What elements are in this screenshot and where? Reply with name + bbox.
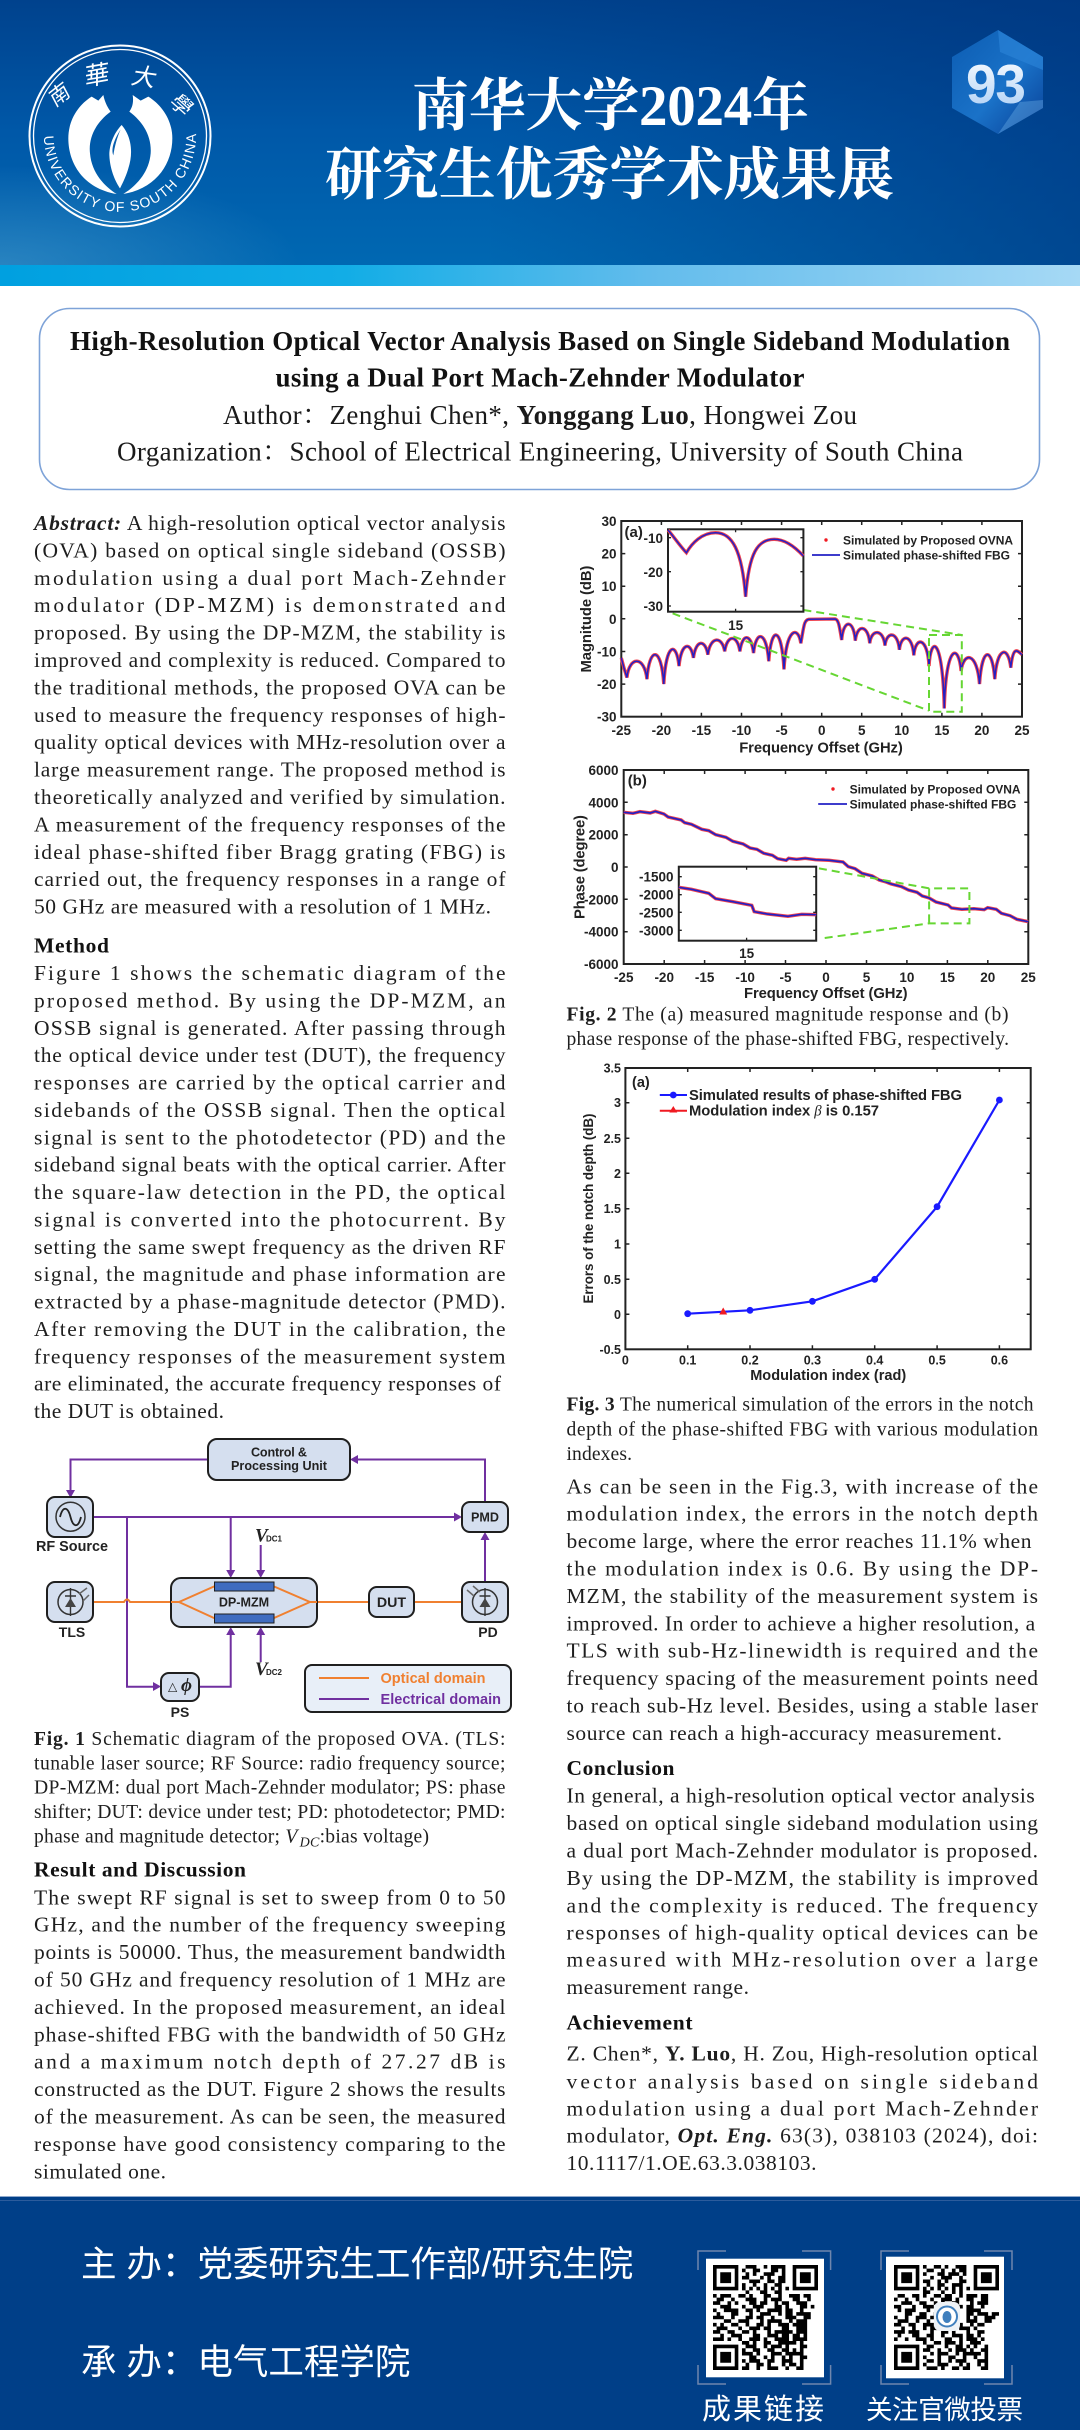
abstract text: improved and complexity is reduced. Compared to [34, 648, 506, 672]
DUT [369, 1587, 414, 1617]
method section: signal, the magnitude and phase information are [34, 1262, 505, 1286]
discussion continued: As can be seen in the Fig.3, with increase of the [566, 1474, 1038, 1498]
PD [462, 1582, 508, 1640]
PD: PD [478, 1624, 498, 1640]
result and discussion section: Result and Discussion [34, 1858, 246, 1882]
achievement section: modulator, Opt. Eng. 63(3), 038103 (2024), doi: [566, 2124, 1038, 2148]
conclusion section: Conclusion [566, 1756, 675, 1780]
RF source [36, 1497, 108, 1555]
PS phase shifter: PS [171, 1704, 189, 1720]
axis labels: 1.5 [604, 1202, 621, 1216]
abstract text: quality optical devices with MHz-resolution over a [34, 730, 506, 754]
PMD: PMD [471, 1510, 499, 1524]
chart: figure 3 notch depth errors: (a) [632, 1075, 650, 1091]
axis labels: 5 [863, 970, 871, 985]
legend [818, 782, 1021, 812]
discussion continued: improved. In order to achieve a higher resolution, a [566, 1611, 1036, 1635]
figure 1 caption [34, 1729, 506, 1851]
university logo: 南 [43, 73, 75, 114]
axis labels: 10 [899, 970, 914, 985]
result and discussion section: and a maximum notch depth of 27.27 dB is [34, 2050, 506, 2074]
curve [624, 811, 1028, 938]
inset: -20 [643, 565, 663, 580]
method section: are eliminated, the accurate frequency responses of [34, 1372, 502, 1396]
inset [643, 529, 803, 633]
abstract text: carried out, the frequency responses in a range of [34, 867, 506, 891]
abstract text: proposed. By using the DP-MZM, the stability is [34, 621, 506, 645]
discussion continued: frequency spacing of the measurement points need [566, 1666, 1038, 1690]
method section: Figure 1 shows the schematic diagram of the [34, 961, 506, 985]
result and discussion section: achieved. In the proposed measurement, an ideal [34, 1995, 506, 2019]
axis labels: 0.4 [866, 1354, 883, 1368]
inset: 15 [728, 618, 744, 633]
organizers text: 主 办：党委研究生工作部/研究生院 [81, 2244, 633, 2284]
axis labels: -0.5 [599, 1343, 621, 1357]
figure 2 caption: Fig. 2 The (a) measured magnitude response and (b) [566, 1005, 1008, 1026]
inset: -10 [643, 531, 663, 546]
chart: figure 2a magnitude response: (a) [624, 524, 643, 541]
figure 1 caption: shifter; DUT: device under test; PD: photodetector; PMD: [34, 1802, 506, 1823]
header banner [0, 0, 1080, 286]
axis labels: 0.5 [604, 1273, 621, 1287]
organizers text: 承 办：电气工程学院 [81, 2342, 410, 2382]
figure 1 caption: Fig. 1 Schematic diagram of the proposed OVA. (TLS: [34, 1729, 506, 1750]
conclusion section: By using the DP-MZM, the stability is improved [566, 1866, 1038, 1890]
VDC2 label [255, 1659, 283, 1680]
achievement section: modulation using a dual port Mach-Zehnder [566, 2097, 1038, 2121]
PS phase shifter [161, 1673, 199, 1720]
DP-MZM modulator: DP-MZM [219, 1596, 269, 1610]
chart: figure 2b phase response [572, 763, 1036, 1002]
axis labels: -25 [614, 970, 634, 985]
figure 3 caption: depth of the phase-shifted FBG with various modulation [566, 1420, 1038, 1441]
method section: sidebands of the OSSB signal. Then the optical [34, 1098, 506, 1122]
axis labels: 0.6 [991, 1354, 1008, 1368]
method section: signal is sent to the photodetector (PD) and the [34, 1125, 506, 1149]
axis labels [581, 1062, 1008, 1384]
university logo: 學 [163, 88, 201, 122]
discussion continued [566, 1474, 1038, 1745]
discussion continued: become large, where the error reaches 11.1% when [566, 1529, 1032, 1553]
figure 1 caption: DC [299, 1836, 320, 1851]
axis labels: 0.3 [804, 1354, 821, 1368]
axis labels: 15 [940, 970, 955, 985]
figure 1 caption: tunable laser source; RF Source: radio frequency source; [34, 1753, 506, 1774]
result and discussion section: response have good consistency comparing to the [34, 2132, 506, 2156]
legend: Simulated by Proposed OVNA [850, 782, 1021, 796]
TLS [47, 1582, 93, 1640]
abstract text: modulation using a dual port Mach-Zehnder [34, 566, 506, 590]
result and discussion section: of the measurement. As can be seen, the measured [34, 2104, 506, 2128]
method section: sideband signal beats with the optical carrier. After [34, 1153, 506, 1177]
result and discussion section: The swept RF signal is set to sweep from 0 to 50 [34, 1885, 506, 1909]
figure 3 caption: Fig. 3 The numerical simulation of the errors in the notch [566, 1395, 1034, 1416]
DP-MZM modulator [171, 1578, 317, 1627]
abstract text: ideal phase-shifted fiber Bragg grating (FBG) is [34, 840, 505, 864]
inset: -3000 [639, 923, 674, 938]
method section: setting the same swept frequency as the driven RF [34, 1235, 506, 1259]
conclusion section: and the complexity is reduced. The frequency [566, 1893, 1038, 1917]
axis labels: -6000 [584, 957, 618, 972]
method section: proposed method. By using the DP-MZM, an [34, 988, 506, 1012]
method section: frequency responses of the measurement system [34, 1344, 506, 1368]
method section: Method [34, 934, 109, 958]
abstract text [32, 511, 506, 919]
axis labels: -4000 [584, 925, 618, 940]
method section: the square-law detection in the PD, the optical [34, 1180, 506, 1204]
method section: responses are carried by the optical carrier and [34, 1070, 506, 1094]
axis labels: 0 [609, 612, 616, 627]
axis labels: 2.5 [604, 1132, 621, 1146]
RF source: RF Source [36, 1539, 108, 1555]
axis labels: -2000 [584, 892, 618, 907]
method section: signal is converted into the photocurrent. By [34, 1207, 506, 1231]
axis labels: 3.5 [604, 1062, 621, 1076]
axis labels: 0.5 [928, 1354, 946, 1368]
axis labels: 20 [980, 970, 995, 985]
axis labels: -30 [597, 710, 616, 725]
figure 3 caption: indexes. [566, 1444, 632, 1465]
method section: After removing the DUT in the calibration, the [34, 1317, 506, 1341]
axis labels: 0 [611, 860, 618, 875]
axis labels: 25 [1014, 723, 1030, 738]
VDC1 label: V [255, 1526, 269, 1547]
conclusion section: based on optical single sideband modulation using [566, 1811, 1038, 1835]
abstract text: 50 GHz are measured with a resolution of 1 MHz. [34, 895, 491, 919]
method section: the DUT is obtained. [34, 1399, 224, 1423]
DUT: DUT [377, 1595, 406, 1611]
axis labels: -10 [732, 723, 751, 738]
abstract text: theoretically analyzed and verified by simulation. [34, 785, 505, 809]
domain legend: Optical domain [380, 1671, 486, 1687]
university logo: 大 [128, 56, 163, 93]
axis labels: -20 [654, 970, 674, 985]
abstract text: used to measure the frequency responses of high- [34, 703, 505, 727]
footer band [0, 2196, 1080, 2430]
QR code: official WeChat vote [866, 2251, 1023, 2425]
legend [812, 534, 1013, 562]
QR code: achievement link [698, 2251, 831, 2426]
result and discussion section: simulated one. [34, 2159, 166, 2183]
inset [639, 867, 816, 961]
method section: extracted by a phase-magnitude detector (PMD). [34, 1290, 505, 1314]
domain legend: Electrical domain [380, 1692, 501, 1708]
axis labels: 0.1 [679, 1354, 696, 1368]
result and discussion section: GHz, and the number of the frequency sweeping [34, 1913, 506, 1937]
achievement section: 10.1117/1.OE.63.3.038103. [566, 2151, 816, 2175]
figure 1 caption: phase and magnitude detector; V [34, 1827, 297, 1848]
main title: 南华大学2024年 [412, 75, 809, 138]
axis labels: Frequency Offset (GHz) [744, 986, 908, 1002]
control box [208, 1439, 350, 1480]
abstract text: Abstract: A high-resolution optical vector analysis [32, 511, 506, 535]
method section: OSSB signal is generated. After passing through [34, 1016, 506, 1040]
achievement section [566, 2010, 1038, 2175]
axis labels: Modulation index (rad) [750, 1368, 906, 1384]
abstract text: A measurement of the frequency responses of the [34, 812, 505, 836]
conclusion section: measurement range. [566, 1975, 749, 1999]
chart: figure 3 notch depth errors [581, 1062, 1031, 1384]
axis labels: 0 [818, 723, 825, 738]
badge: number 93 [952, 30, 1043, 134]
result and discussion section: of 50 GHz and frequency resolution of 1 MHz are [34, 1968, 506, 1992]
legend: Simulated phase-shifted FBG [850, 798, 1016, 812]
axis labels: 5 [858, 723, 866, 738]
QR code: official WeChat vote: 关注官微投票 [866, 2395, 1023, 2425]
conclusion section: In general, a high-resolution optical vector analysis [566, 1783, 1035, 1807]
discussion continued: MZM, the stability of the measurement system is [566, 1584, 1038, 1608]
figure 2 caption: phase response of the phase-shifted FBG, respectively. [566, 1029, 1009, 1050]
axis labels [572, 763, 1036, 1002]
abstract text: modulator (DP-MZM) is demonstrated and [34, 593, 506, 617]
axis labels: Errors of the notch depth (dB) [581, 1114, 596, 1304]
axis labels: 20 [601, 547, 616, 562]
achievement section: Achievement [566, 2010, 693, 2034]
inset: 15 [739, 946, 755, 961]
axis labels: -20 [652, 723, 671, 738]
QR code: achievement link: 成果链接 [702, 2393, 824, 2426]
VDC2 label: DC2 [266, 1668, 283, 1677]
PS phase shifter: ϕ [181, 1675, 192, 1696]
discussion continued: the modulation index is 0.6. By using the DP- [566, 1556, 1038, 1580]
domain legend [305, 1665, 511, 1712]
achievement section: vector analysis based on single sideband [566, 2069, 1038, 2093]
axis labels: 25 [1021, 970, 1036, 985]
axis labels: 2000 [588, 828, 618, 843]
figure 3 caption [566, 1395, 1038, 1465]
university logo: 華 [85, 54, 109, 94]
method section [34, 934, 506, 1423]
chart: figure 2b phase response: (b) [628, 772, 647, 790]
title box: High-Resolution Optical Vector Analysis Based on Single Sideband Modulation [70, 326, 1010, 356]
axis labels: -25 [612, 723, 632, 738]
university logo [28, 44, 212, 228]
axis labels: 0 [622, 1354, 629, 1368]
axis labels: 2 [614, 1167, 621, 1181]
conclusion section: measured with MHz-resolution over a large [566, 1948, 1038, 1972]
axis labels: 0 [822, 970, 830, 985]
method section: the optical device under test (DUT), the frequency [34, 1043, 506, 1067]
axis labels: -15 [692, 723, 712, 738]
inset: -30 [643, 599, 663, 614]
axis labels: 1 [614, 1238, 621, 1252]
control box: Control & [251, 1446, 307, 1460]
legend: Modulation index β is 0.157 [689, 1104, 879, 1120]
badge: number 93: 93 [966, 53, 1026, 115]
inset: -2500 [639, 905, 674, 920]
VDC1 label: DC1 [266, 1535, 283, 1544]
title box [40, 308, 1040, 490]
axis labels: 30 [601, 514, 616, 529]
result and discussion section: constructed as the DUT. Figure 2 shows the results [34, 2077, 505, 2101]
discussion continued: to reach sub-Hz level. Besides, using a stable laser [566, 1694, 1038, 1718]
legend [660, 1088, 962, 1120]
university logo: UNIVERSITY OF SOUTH CHINA [44, 134, 196, 212]
axis labels: 10 [894, 723, 909, 738]
discussion continued: source can reach a high-accuracy measurement. [566, 1721, 1002, 1745]
abstract text: large measurement range. The proposed method is [34, 758, 506, 782]
VDC2 label: V [255, 1659, 269, 1680]
inset: -1500 [639, 870, 674, 885]
axis labels: 20 [974, 723, 989, 738]
main title: 研究生优秀学术成果展 [325, 144, 894, 207]
axis labels: Magnitude (dB) [579, 565, 595, 672]
title box: using a Dual Port Mach-Zehnder Modulator [276, 363, 805, 393]
curve [621, 619, 1022, 709]
conclusion section: responses of high-quality optical devices can be [566, 1920, 1038, 1944]
chart: figure 2a magnitude response [579, 514, 1030, 756]
axis labels: -15 [695, 970, 715, 985]
axis labels: 6000 [588, 763, 618, 778]
axis labels: 0 [614, 1308, 621, 1322]
data line [684, 1097, 1003, 1317]
figure 1: schematic diagram [36, 1439, 511, 1720]
axis labels: -10 [597, 644, 616, 660]
discussion continued: TLS with sub-Hz-linewidth is required and the [566, 1639, 1038, 1663]
axis labels: 4000 [588, 795, 618, 810]
achievement section: Z. Chen*, Y. Luo, H. Zou, High-resolution optical [566, 2042, 1038, 2066]
figure 2 caption [566, 1005, 1009, 1050]
axis labels: 10 [601, 579, 616, 594]
figure 1 caption: :bias voltage) [320, 1827, 429, 1848]
axis labels: Frequency Offset (GHz) [739, 740, 903, 756]
result and discussion section: phase-shifted FBG with the bandwidth of 50 GHz [34, 2022, 506, 2046]
result and discussion section: points is 50000. Thus, the measurement bandwidth [34, 1940, 506, 1964]
discussion continued: modulation index, the errors in the notch depth [566, 1502, 1038, 1526]
legend: Simulated results of phase-shifted FBG [689, 1088, 962, 1104]
VDC1 label [255, 1526, 283, 1547]
main title [325, 75, 894, 207]
PMD [462, 1502, 508, 1532]
organizers text [81, 2244, 633, 2382]
conclusion section: a dual port Mach-Zehnder modulator is proposed. [566, 1839, 1038, 1863]
PS phase shifter: △ [168, 1680, 178, 1694]
conclusion section [566, 1756, 1038, 1999]
legend: Simulated phase-shifted FBG [843, 548, 1010, 562]
control box: Processing Unit [231, 1459, 328, 1473]
result and discussion section [34, 1858, 506, 2183]
legend: Simulated by Proposed OVNA [843, 534, 1013, 548]
figure 1 caption: DP-MZM: dual port Mach-Zehnder modulator; PS: phase [34, 1777, 506, 1798]
axis labels: -5 [779, 970, 792, 985]
axis labels: -5 [776, 723, 788, 738]
axis labels: 0.2 [741, 1354, 759, 1368]
axis labels: 3 [614, 1096, 621, 1110]
title box: Organization：School of Electrical Engineering, University of South China [117, 437, 963, 467]
axis labels: -10 [735, 970, 755, 985]
TLS: TLS [59, 1624, 85, 1640]
axis labels [579, 514, 1030, 756]
abstract text: (OVA) based on optical single sideband (OSSB) [34, 538, 505, 562]
axis labels: 15 [934, 723, 950, 738]
inset: -2000 [639, 888, 674, 903]
abstract text: the traditional methods, the proposed OVA can be [34, 675, 506, 699]
axis labels: Phase (degree) [572, 815, 588, 919]
title box: Author：Zenghui Chen*, Yonggang Luo, Hongwei Zou [223, 400, 858, 430]
axis labels: -20 [597, 677, 616, 692]
